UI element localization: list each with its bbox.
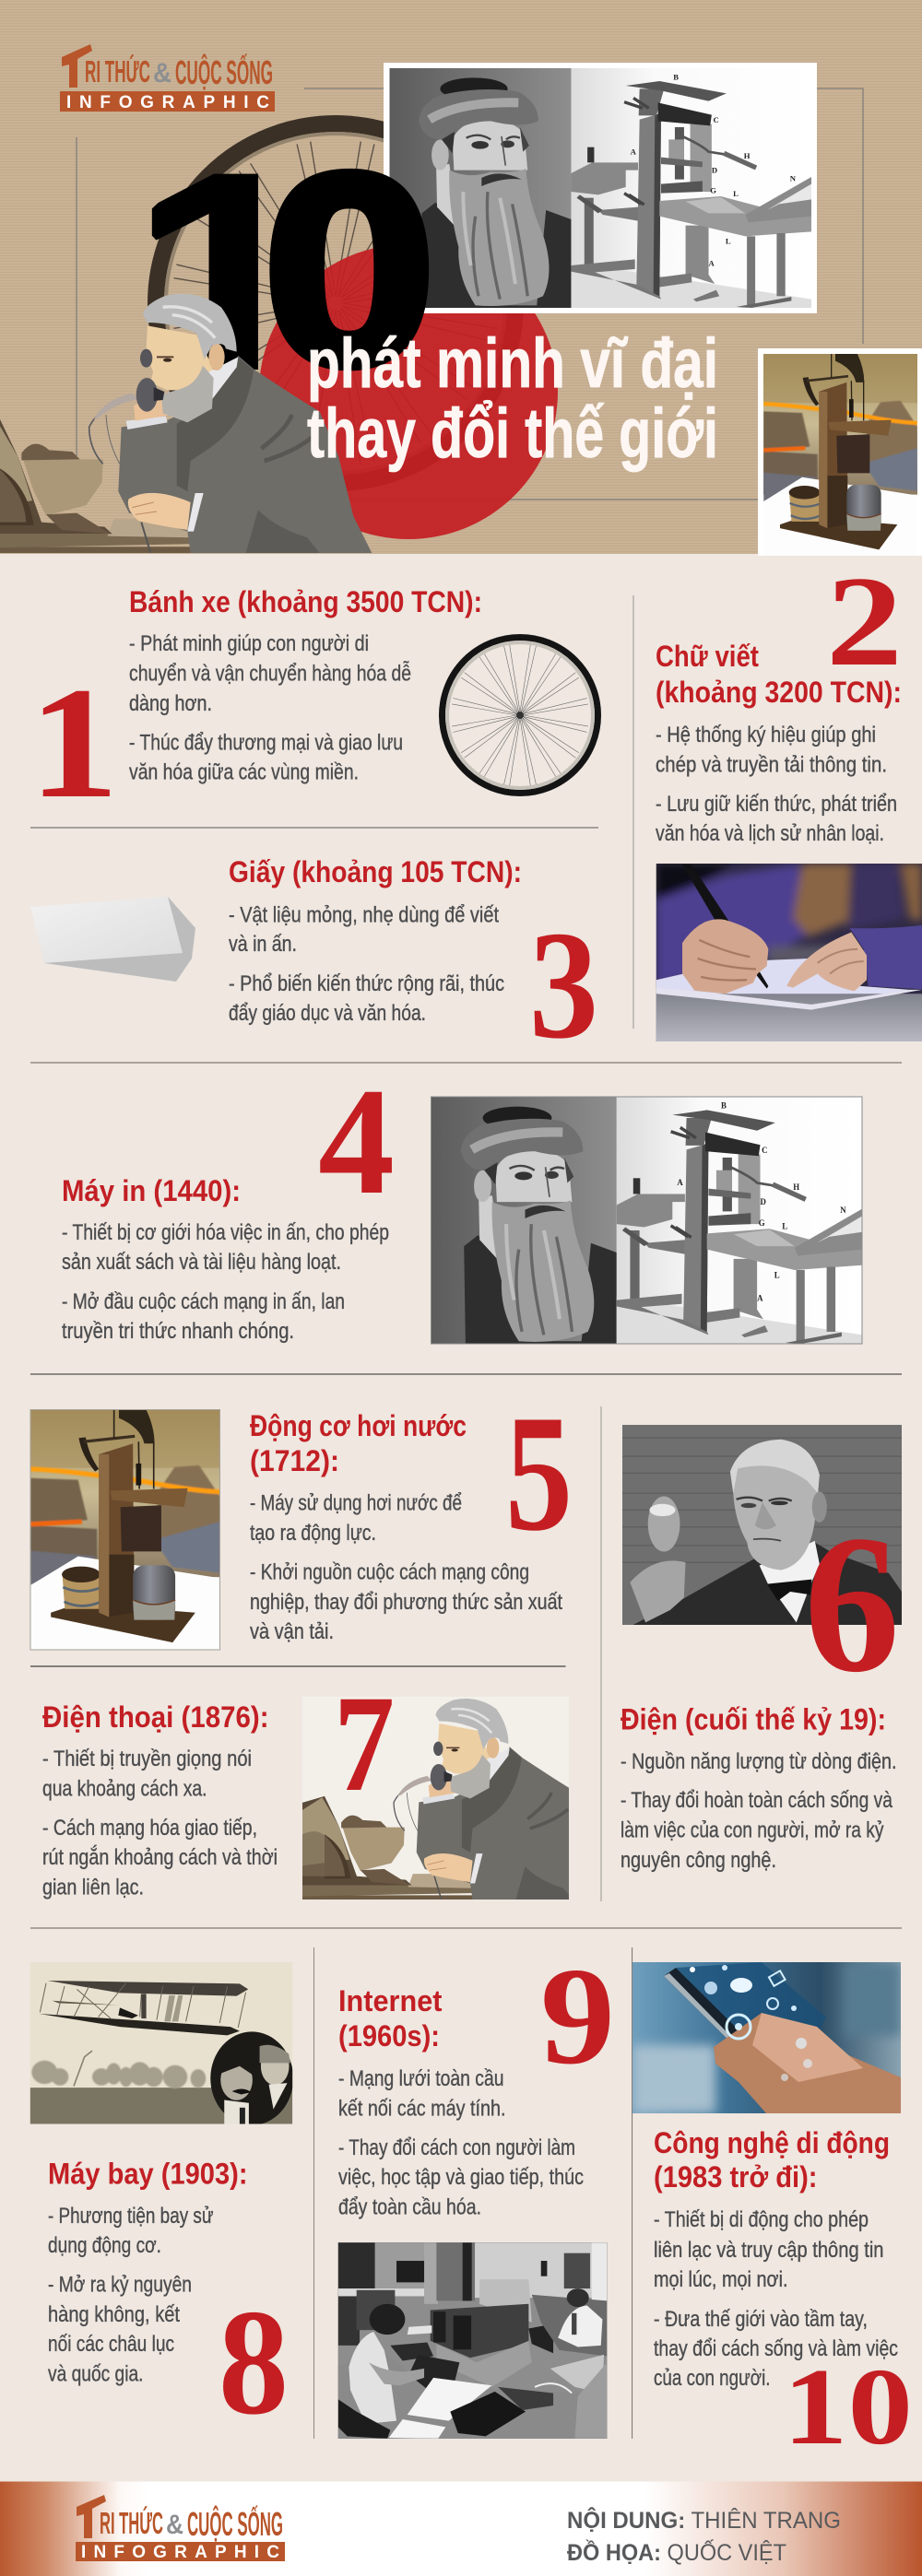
red circle: [259, 244, 558, 539]
text block: tạo ra động lực.: [250, 1521, 376, 1546]
footer: [0, 2481, 922, 2576]
number 7: 7: [334, 1667, 395, 1820]
number 5: 5: [505, 1382, 573, 1566]
text block: [654, 2207, 898, 2391]
text block: - Khởi nguồn cuộc cách mạng công: [250, 1559, 529, 1585]
photo: computer room: [337, 2242, 607, 2439]
number 3: 3: [529, 900, 598, 1071]
text block: - Phổ biến kiến thức rộng rãi, thúc: [229, 971, 504, 996]
text block: chuyển và vận chuyển hàng hóa dễ: [129, 662, 411, 686]
text block: nối các châu lục: [48, 2332, 174, 2357]
text block: rút ngắn khoảng cách và thời: [42, 1845, 278, 1870]
number 1: 1: [29, 655, 119, 831]
logo: RI THỨC: [85, 54, 150, 88]
text block: liên lạc và truy cập thông tin: [654, 2238, 883, 2263]
photo: bicycle wheel: [443, 638, 597, 793]
heading: (1983 trở đi):: [654, 2160, 817, 2194]
heading: (1712):: [250, 1444, 339, 1477]
heading: Điện thoại (1876):: [42, 1700, 269, 1734]
text block: kết nối các máy tính.: [338, 2096, 505, 2122]
text block: đẩy toàn cầu hóa.: [338, 2195, 481, 2219]
text block: - Hệ thống ký hiệu giúp ghi: [656, 723, 876, 747]
photo: stack of paper: [30, 897, 195, 982]
text block: chép và truyền tải thông tin.: [656, 752, 887, 778]
number 4: 4: [318, 1056, 395, 1226]
panel: airplane: [30, 1962, 293, 2446]
panel: mobile technology: [632, 1962, 913, 2467]
text block: [42, 1747, 278, 1900]
heading: [654, 2126, 890, 2194]
illustration: man on telephone: [302, 1697, 569, 1900]
heading: Chữ viết: [656, 640, 759, 673]
number 6: 6: [804, 1495, 900, 1713]
title: [307, 324, 718, 473]
text block: [129, 631, 411, 785]
panel: printing press: [62, 1056, 862, 1344]
heading: [250, 1409, 467, 1477]
credits: NỘI DUNG: THIÊN TRANG: [567, 2506, 841, 2534]
text block: và vận tải.: [250, 1619, 334, 1644]
footer logo: RI THỨC: [100, 2506, 163, 2540]
text block: - Thiết bị di động cho phép: [654, 2207, 869, 2232]
text block: và in ấn.: [229, 932, 297, 957]
text block: - Phát minh giúp con người di: [129, 631, 369, 656]
footer: CUỘC SỐNG: [187, 2504, 283, 2543]
title: thay đổi thế giới: [307, 394, 718, 473]
photo: child writing: [656, 864, 922, 1041]
number 10: 10: [783, 2346, 913, 2467]
heading: Internet: [338, 1984, 443, 2017]
text block: - Mạng lưới toàn cầu: [338, 2066, 503, 2091]
text block: - Đưa thế giới vào tầm tay,: [654, 2307, 868, 2332]
photo: Wright brothers airplane: [30, 1962, 293, 2123]
illustration: bicycle wheel: [156, 124, 515, 483]
text block: - Phương tiện bay sử: [48, 2204, 214, 2229]
big number 10: 1: [132, 116, 324, 426]
big number 10: 0: [264, 120, 435, 420]
heading: Điện (cuối thế kỷ 19):: [621, 1703, 886, 1736]
heading: Động cơ hơi nước: [250, 1409, 467, 1442]
illustration: man on telephone: [0, 294, 372, 553]
text block: mọi lúc, mọi nơi.: [654, 2267, 787, 2292]
hero banner: CUỘC SỐNG: [175, 53, 273, 91]
text block: [656, 723, 897, 846]
photo: Edison with light bulb: [622, 1425, 902, 1625]
text block: văn hóa giữa các vùng miền.: [129, 759, 359, 785]
title: phát minh vĩ đại: [307, 324, 718, 403]
panel: paper: [30, 855, 598, 1071]
photo: smartphone: [632, 1962, 901, 2113]
text block: và quốc gia.: [48, 2361, 144, 2387]
text block: - Thúc đẩy thương mại và giao lưu: [129, 730, 403, 756]
heading: (1960s):: [338, 2019, 440, 2053]
text block: [48, 2204, 214, 2387]
text block: truyền tri thức nhanh chóng.: [62, 1319, 294, 1344]
text block: - Thiết bị truyền giọng nói: [42, 1747, 252, 1771]
text block: - Máy sử dụng hơi nước để: [250, 1491, 462, 1515]
panel: wheel: [29, 585, 597, 831]
logo: INFOGRAPHIC: [66, 93, 269, 112]
photo: Gutenberg and printing press: [384, 63, 817, 313]
text block: nguyên công nghệ.: [621, 1848, 776, 1873]
heading: Máy bay (1903):: [48, 2157, 247, 2190]
heading: [338, 1984, 443, 2053]
heading: Giấy (khoảng 105 TCN):: [229, 855, 522, 888]
text block: [229, 903, 504, 1026]
photo: steam engine: [30, 1410, 219, 1650]
logo: [60, 44, 275, 112]
text block: [62, 1220, 389, 1344]
text block: - Mở đầu cuộc cách mạng in ấn, lan: [62, 1289, 345, 1314]
photo: Gutenberg and printing press: [431, 1097, 862, 1344]
text block: [338, 2066, 584, 2219]
text block: - Cách mạng hóa giao tiếp,: [42, 1816, 257, 1841]
text block: việc, học tập và giao tiếp, thúc: [338, 2165, 584, 2190]
panel: steam engine: [30, 1382, 573, 1650]
text block: hàng không, kết: [48, 2302, 180, 2327]
credits: [567, 2506, 841, 2566]
number 9: 9: [540, 1938, 615, 2093]
big number 10: [151, 168, 430, 371]
footer logo: [76, 2495, 285, 2562]
logo: &: [153, 58, 171, 88]
text block: dàng hơn.: [129, 691, 212, 716]
panel: internet: [338, 1938, 615, 2439]
text block: nghiệp, thay đổi phương thức sản xuất: [250, 1590, 562, 1615]
text block: gian liên lạc.: [42, 1875, 144, 1900]
panel: telephone: [42, 1697, 569, 1900]
photo: steam engine: [758, 348, 922, 556]
text block: dụng động cơ.: [48, 2233, 161, 2258]
text block: - Mở ra kỷ nguyên: [48, 2273, 192, 2297]
heading: Máy in (1440):: [62, 1174, 241, 1207]
hero banner: [0, 0, 922, 556]
text block: đẩy giáo dục và văn hóa.: [229, 1001, 426, 1026]
text block: - Thiết bị cơ giới hóa việc in ấn, cho phép: [62, 1220, 389, 1245]
credits: ĐỒ HỌA: QUỐC VIỆT: [567, 2538, 786, 2566]
heading: [656, 640, 902, 709]
heading: Công nghệ di động: [654, 2126, 890, 2159]
text block: [621, 1749, 896, 1873]
footer background: [0, 2481, 922, 2576]
text block: [250, 1491, 562, 1644]
text block: của con người.: [654, 2366, 771, 2391]
text block: - Thay đổi cách con người làm: [338, 2135, 575, 2160]
text block: qua khoảng cách xa.: [42, 1777, 207, 1801]
text block: sản xuất sách và tài liệu hàng loạt.: [62, 1250, 341, 1275]
number 2: 2: [826, 550, 903, 693]
text block: - Vật liệu mỏng, nhẹ dùng để viết: [229, 903, 499, 927]
panel: writing: [656, 550, 922, 1041]
footer logo: INFOGRAPHIC: [81, 2543, 279, 2562]
panel: electricity: [621, 1425, 902, 1873]
hero textured background: [0, 0, 922, 554]
number 8: 8: [219, 2279, 289, 2446]
footer logo: &: [166, 2510, 183, 2540]
heading: Bánh xe (khoảng 3500 TCN):: [129, 585, 482, 618]
